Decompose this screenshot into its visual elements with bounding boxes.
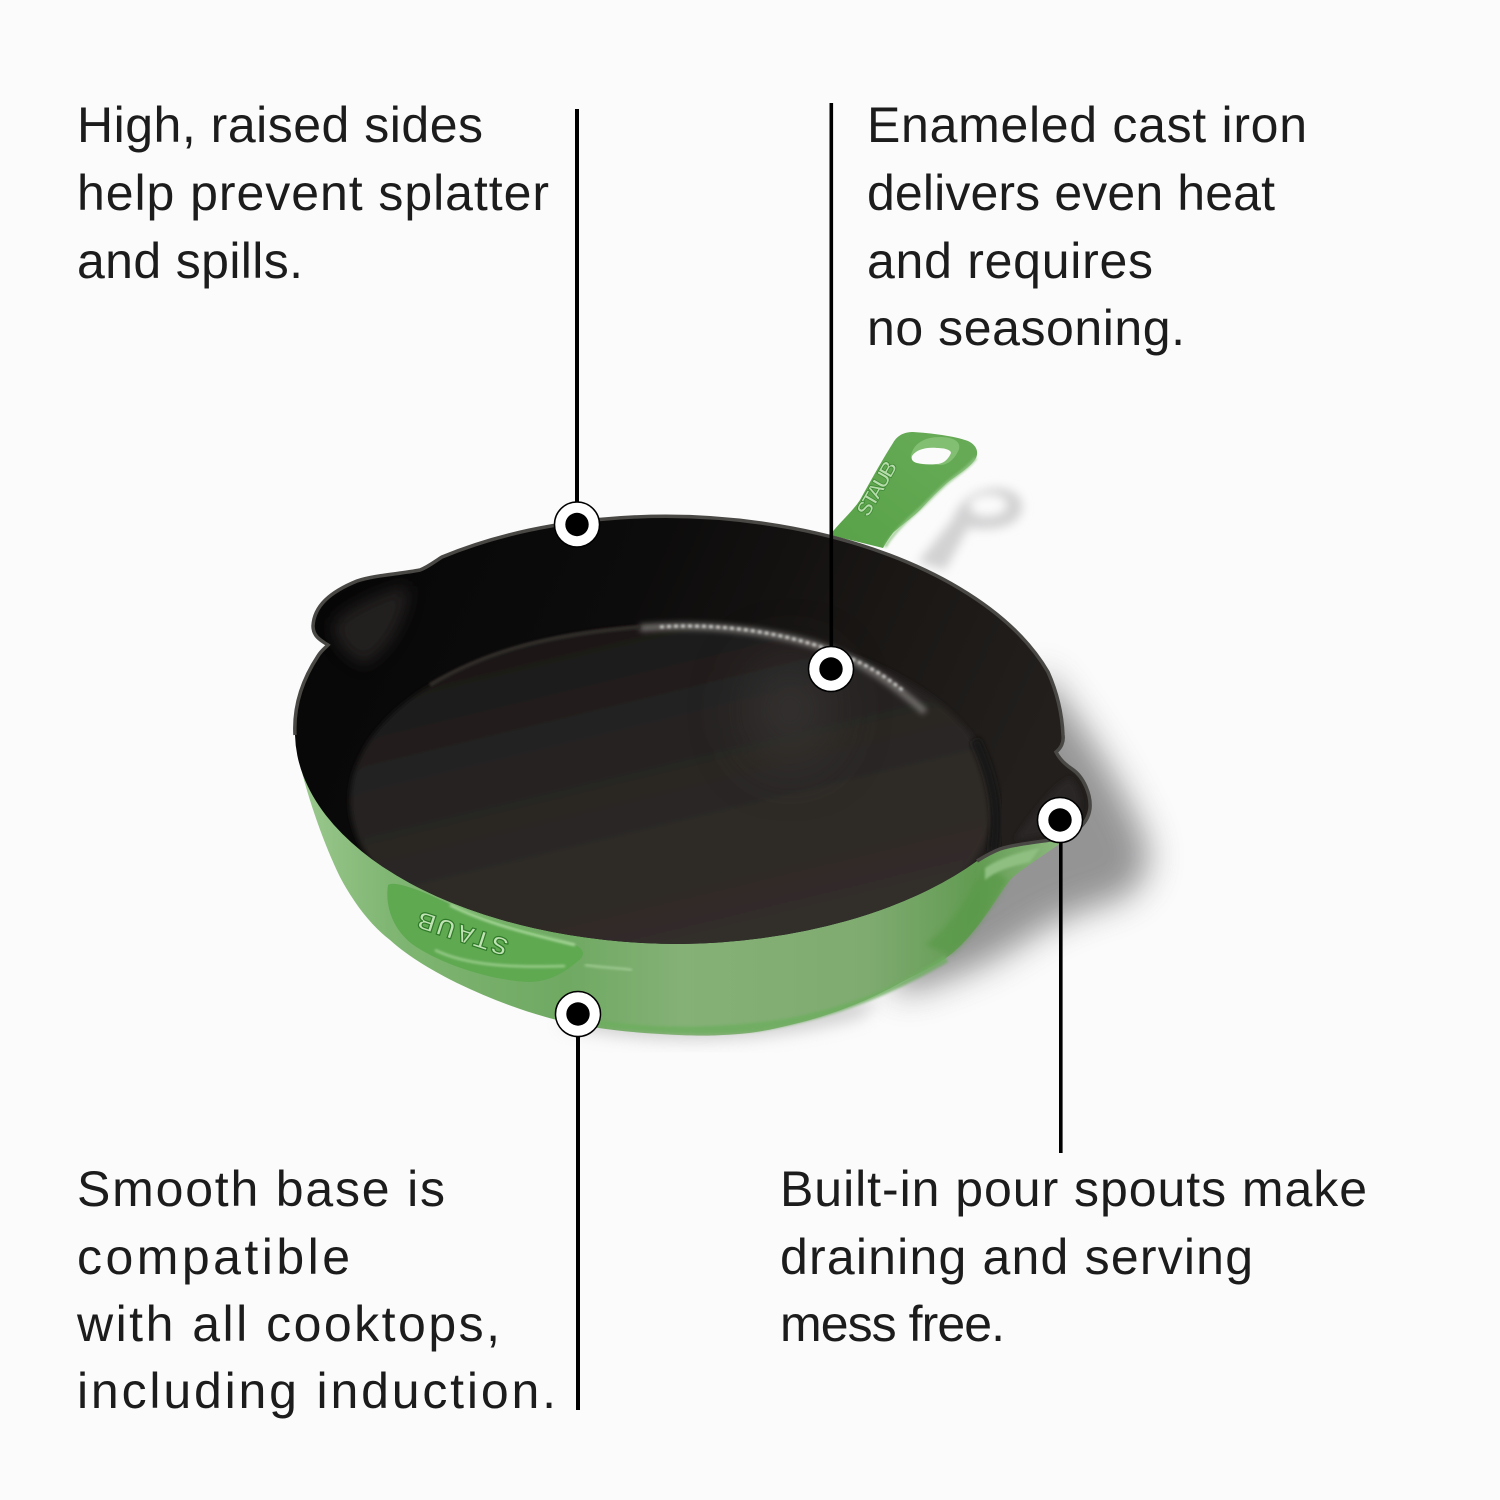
text: high raised sides (77, 97, 549, 289)
spout underside highlight (985, 848, 1040, 880)
green exterior body (296, 745, 1068, 1036)
body right shading (925, 865, 1008, 955)
body lower highlight band (560, 955, 948, 1034)
text: high raised sides: High, raised sides (77, 97, 483, 153)
text: high raised sides: and spills. (77, 233, 303, 289)
interior contents clipped to rim (334, 585, 1080, 974)
infographic canvas (77, 103, 1365, 1418)
leader line (575, 109, 579, 509)
interior rim shape (295, 516, 1090, 944)
lug highlight bottom (435, 950, 565, 967)
text: enameled cast iron: delivers even heat (867, 165, 1275, 221)
body crease (585, 965, 632, 970)
handle edge highlight (885, 458, 976, 547)
text: enameled cast iron: no seasoning. (867, 300, 1185, 356)
floor edge specular glow (640, 626, 925, 712)
leader line (576, 1030, 580, 1410)
pan floor (348, 630, 990, 944)
pan cast shadow (560, 488, 1148, 1040)
marker (556, 992, 600, 1036)
floor edge faint line (430, 627, 640, 685)
text: high raised sides: help prevent splatter (77, 165, 549, 221)
handle hole bevel (911, 437, 959, 465)
marker (808, 646, 854, 692)
handle embossed lettering: STAUB (852, 457, 902, 520)
text: smooth base (76, 1161, 556, 1419)
text: pour spouts: Built-in pour spouts make (780, 1161, 1367, 1217)
handle (830, 432, 977, 548)
text: pour spouts: mess free. (780, 1296, 1005, 1352)
text: enameled cast iron: Enameled cast iron (867, 97, 1307, 153)
text: enameled cast iron: and requires (867, 233, 1153, 289)
callout: pour spouts (780, 798, 1367, 1352)
marker (1038, 798, 1082, 842)
text: smooth base: including induction. (77, 1363, 556, 1419)
skillet photo illustration (295, 432, 1148, 1040)
callout: smooth base (76, 992, 600, 1419)
wall shading near floor right (975, 740, 996, 852)
text: enameled cast iron (867, 97, 1307, 356)
text: pour spouts (780, 1161, 1367, 1352)
floor edge specular core (660, 626, 905, 692)
callout: enameled cast iron (808, 97, 1307, 692)
black interior (295, 516, 1090, 974)
spout glow right (1021, 783, 1078, 837)
helper handle lug (387, 884, 583, 982)
leader line (830, 103, 833, 653)
lug embossed lettering: STAUB (414, 905, 512, 961)
text: smooth base: compatible (77, 1229, 350, 1285)
text: smooth base: Smooth base is (77, 1161, 445, 1217)
text: smooth base: with all cooktops, (76, 1296, 500, 1352)
rim edge (295, 516, 1090, 861)
text: pour spouts: draining and serving (780, 1229, 1253, 1285)
handle shadow (918, 488, 1022, 570)
callout: high raised sides (77, 97, 600, 547)
handle hole (912, 448, 951, 464)
leader line (1059, 836, 1063, 1153)
floor soft glare (754, 664, 826, 744)
lug highlight top (450, 905, 575, 945)
spout glow left (334, 585, 408, 665)
marker (554, 502, 600, 547)
